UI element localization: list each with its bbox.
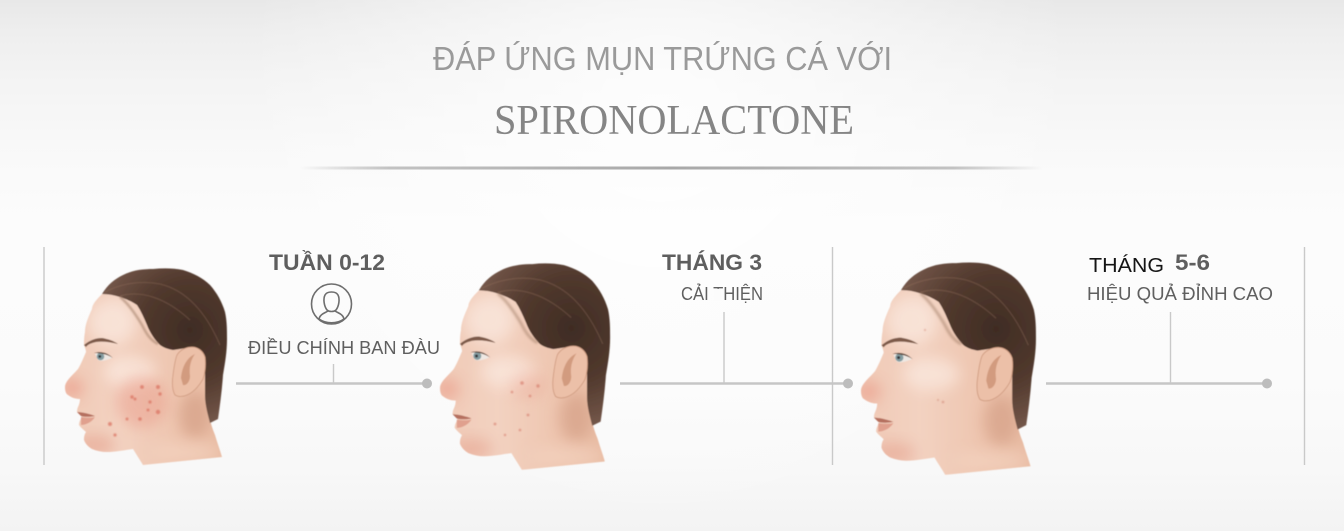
panel dividers	[44, 247, 1304, 465]
timeline connector 3	[1046, 312, 1272, 388]
label: hieu qua dinh cao: HIỆU QUẢ ĐỈNH CAO	[1087, 283, 1273, 304]
face: clear skin	[856, 262, 1039, 486]
title line 2: drug name: SPIRONOLACTONE	[494, 98, 854, 144]
header rule	[300, 166, 1042, 170]
panel: month 3	[435, 250, 853, 480]
heading: tuan 0-12: TUẦN 0-12	[269, 250, 385, 275]
face: severe acne	[60, 268, 230, 475]
heading: thang 5-6: THÁNG	[1089, 254, 1164, 277]
face: moderate acne	[435, 263, 613, 480]
timeline connector 2	[620, 312, 853, 388]
icon: person in circle	[312, 284, 352, 324]
panel: week 0-12	[60, 250, 440, 475]
heading: thang 3: THÁNG 3	[662, 250, 762, 275]
heading: thang 5-6	[1089, 250, 1210, 277]
panel: month 5-6	[856, 250, 1273, 486]
title line 1: ĐÁP ỨNG MỤN TRỨNG CÁ VỚI	[433, 40, 892, 77]
label: cai thien: CẢI THIỆN	[681, 283, 763, 304]
timeline connector 1	[236, 364, 432, 388]
label: dieu chinh ban dau: ĐIỀU CHÍNH BAN ĐÀU	[248, 337, 440, 358]
heading: thang 5-6: 5-6	[1175, 250, 1210, 275]
